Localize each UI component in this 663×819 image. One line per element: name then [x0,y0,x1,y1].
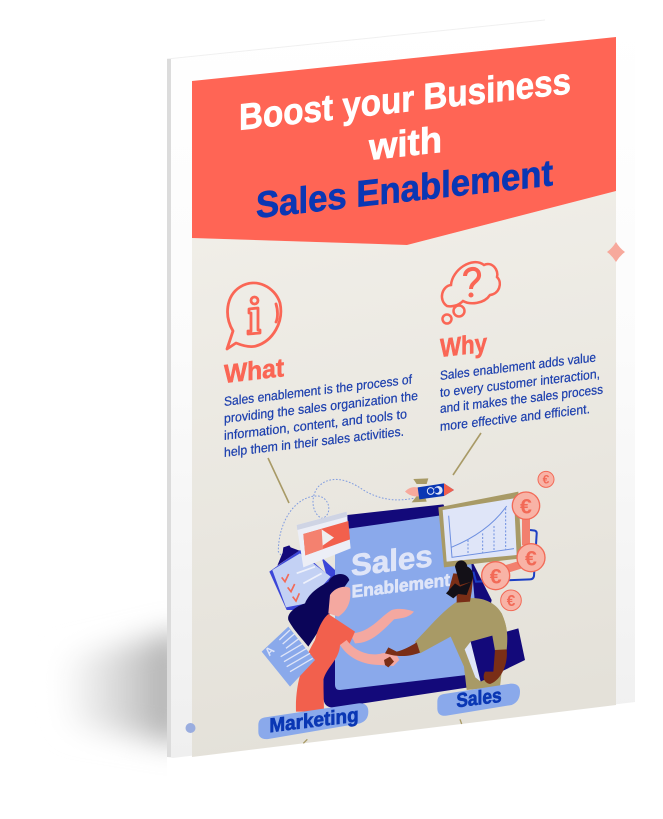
man [384,560,525,690]
document [262,627,315,687]
folder held by man [471,628,525,682]
title: Boost your Business [239,59,571,138]
text block: what [224,372,418,460]
papers behind folder [465,642,481,682]
title [239,59,571,226]
man's body [415,598,507,690]
coin 2: € [520,494,532,518]
page shadow [60,630,185,745]
woman's hair [288,574,349,647]
connector: what [268,458,289,503]
man's upper arm [488,613,507,651]
coin connectors [503,518,526,570]
text block: why: more effective and efficient. [440,401,590,434]
man's beard [446,582,472,598]
woman's dress [296,614,355,712]
clipboard [269,545,335,610]
rocket [405,478,454,502]
tablet screen [335,512,475,690]
woman's raised arm [350,609,414,643]
screen title: Enablement [352,570,450,602]
coin 1: € [543,473,550,487]
document: A [263,645,277,659]
document page [167,20,635,758]
title: with [368,118,442,168]
decoration: dot [186,723,196,733]
connector: why [453,433,481,475]
label: Marketing: Marketing [269,704,359,737]
label: Sales: Sales [456,685,502,712]
screen title [351,538,450,602]
tablet frame [323,504,492,708]
illustration [258,471,554,743]
woman's face [328,587,350,617]
line chart panel [438,492,522,567]
decoration: star [607,242,625,262]
text block: why: and it makes the sales process [440,382,603,416]
connector stubs [303,719,462,743]
text block: why: to every customer interaction, [440,366,600,400]
woman [288,574,414,712]
header banner [192,37,616,245]
text block: what: Sales enablement is the process of [224,372,412,409]
text block: why: Sales enablement adds value [440,349,596,383]
video window [297,512,351,567]
screen title: Sales [351,538,433,583]
coin 3: € [525,546,537,570]
dotted rocket path [278,479,413,592]
heading: Why: Why [440,328,487,363]
heading: What: What [224,352,284,389]
label: Sales [437,684,520,716]
blue board behind coins [473,530,537,582]
text block: why [440,349,603,434]
text block: what: help them in their sales activities. [224,424,404,460]
man's neck and face [448,573,473,603]
text block: what: information, content, and tools to [224,406,407,443]
euro coins [482,471,554,611]
man's hand on folder [484,649,507,684]
icon: info speech bubble [227,283,281,349]
man's arm and hand [385,642,420,656]
woman's lower arm [340,640,399,666]
icon: thought cloud with question mark [442,262,500,324]
clasped fingers [384,657,394,667]
coin 4: € [490,564,502,588]
text block: what: providing the sales organization the [224,388,418,426]
man's hair [455,560,473,585]
title: Sales Enablement [256,151,553,226]
coin 5: € [507,593,516,610]
